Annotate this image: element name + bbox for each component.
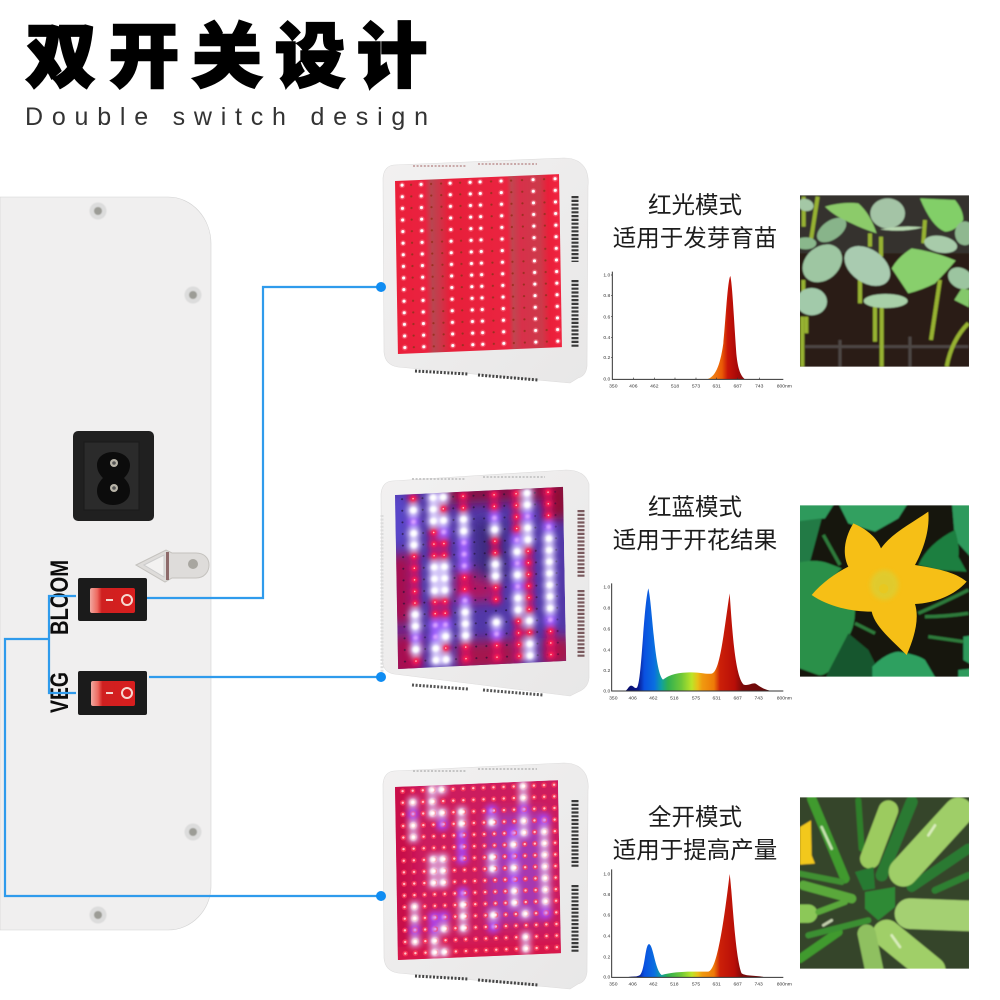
vents [413, 164, 575, 380]
chart: red blue spectrum: 687 [733, 695, 742, 701]
title: 双开关设计 [26, 18, 427, 96]
chart: red blue spectrum: 462 [649, 695, 658, 701]
screws [90, 202, 202, 924]
label: VEG: VEG [46, 672, 74, 713]
chart: red spectrum: 743 [755, 383, 764, 389]
back plate body [0, 197, 211, 930]
chart: full spectrum: 0.0 [603, 975, 611, 981]
chart: red blue spectrum: 0.0 [603, 689, 611, 695]
chart: red blue spectrum [603, 583, 792, 701]
chart: full spectrum: 687 [733, 981, 742, 987]
chart: red blue spectrum: 575 [692, 695, 700, 701]
panel: red light mode lamp [383, 158, 588, 383]
chart: red spectrum: 350 [609, 383, 618, 389]
chart: full spectrum: 575 [692, 981, 700, 987]
chart: red blue spectrum: 800nm [777, 695, 792, 701]
photo: zucchini [800, 797, 969, 969]
vents [413, 769, 575, 985]
chart: full spectrum: 800nm [777, 981, 792, 987]
hanger bracket [136, 550, 209, 582]
chart: red spectrum: 518 [671, 383, 679, 389]
subtitle: Double switch design [25, 103, 428, 131]
chart: red blue spectrum: 350 [609, 695, 618, 701]
label: BLOOM: BLOOM [46, 560, 74, 635]
chart: red spectrum: 406 [629, 383, 638, 389]
text: full mode: 全开模式 [648, 804, 742, 830]
chart: full spectrum: 1.0 [603, 871, 611, 877]
chart: red spectrum: 0.8 [603, 293, 611, 299]
chart: red spectrum: 687 [733, 383, 742, 389]
chart: red blue spectrum: 1.0 [603, 585, 611, 591]
LED array [395, 174, 562, 354]
chart: full spectrum: 0.8 [603, 892, 611, 898]
chart: red spectrum: 0.2 [603, 355, 611, 361]
switch: bloom [78, 578, 147, 621]
photo: yellow flower [800, 505, 969, 677]
text: red blue mode [613, 494, 777, 553]
LED array [395, 486, 566, 669]
power socket [73, 431, 154, 521]
switch: veg [78, 671, 147, 715]
chart: full spectrum: 631 [712, 981, 721, 987]
vents [382, 477, 581, 695]
chart: full spectrum [603, 869, 792, 987]
connector lines [5, 282, 386, 901]
chart: full spectrum: 0.2 [603, 954, 611, 960]
chart: red spectrum: 573 [692, 383, 700, 389]
panel: red blue mode lamp [381, 470, 589, 696]
chart: red spectrum: 0.4 [603, 335, 611, 341]
text: full mode: 适用于提高产量 [613, 837, 777, 863]
chart: full spectrum: 743 [754, 981, 763, 987]
text: red blue mode: 适用于开花结果 [613, 527, 777, 553]
chart: red blue spectrum: 406 [628, 695, 637, 701]
chart: red blue spectrum: 0.2 [603, 668, 611, 674]
chart: red spectrum: 0.0 [603, 376, 611, 382]
chart: red spectrum: 0.6 [603, 314, 611, 320]
chart: full spectrum: 406 [628, 981, 637, 987]
chart: red spectrum: 800nm [777, 383, 792, 389]
chart: red spectrum: 462 [650, 383, 659, 389]
chart: red blue spectrum: 743 [754, 695, 763, 701]
chart: red spectrum: 1.0 [603, 273, 611, 279]
lamp housing [383, 763, 588, 989]
chart: red blue spectrum: 0.6 [603, 627, 611, 633]
lamp housing [383, 158, 588, 383]
lamp housing [381, 470, 589, 696]
chart: full spectrum: 0.6 [603, 913, 611, 919]
chart: red spectrum: 631 [712, 383, 721, 389]
chart: red blue spectrum: 0.4 [603, 647, 611, 653]
text: full mode [613, 804, 777, 863]
chart: red blue spectrum: 631 [712, 695, 721, 701]
LED array [395, 780, 561, 960]
chart: full spectrum: 350 [609, 981, 618, 987]
text: red mode: 红光模式 [648, 192, 742, 218]
panel: grow light back plate with switches [0, 197, 211, 930]
chart: red spectrum [603, 272, 792, 389]
chart: full spectrum: 518 [670, 981, 679, 987]
chart: red blue spectrum: 518 [670, 695, 679, 701]
photo: seedlings [800, 195, 969, 367]
panel: full spectrum mode lamp [383, 763, 588, 989]
chart: full spectrum: 0.4 [603, 934, 611, 940]
text: red blue mode: 红蓝模式 [648, 494, 742, 520]
text: red mode: 适用于发芽育苗 [613, 225, 777, 251]
chart: full spectrum: 462 [649, 981, 658, 987]
chart: red blue spectrum: 0.8 [603, 605, 611, 611]
text: red mode [613, 192, 777, 251]
